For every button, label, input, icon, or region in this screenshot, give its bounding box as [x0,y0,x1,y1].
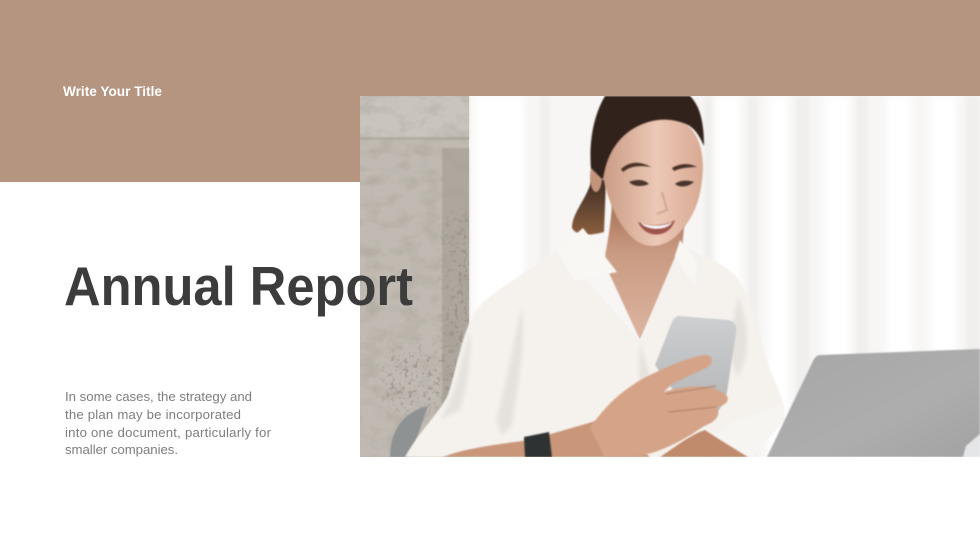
small title: Write Your Title [63,83,162,99]
header band [0,0,980,182]
description text: the plan may be incorporated [65,407,241,422]
chair [390,406,512,457]
face [601,116,703,246]
ponytail [572,178,606,235]
description text: In some cases, the strategy and [65,389,252,404]
hair [590,96,704,180]
description text: into one document, particularly for [65,425,272,440]
collar [557,228,697,286]
finger shadows [666,386,716,412]
photo: woman using a phone beside a laptop [360,96,980,457]
neck [604,205,686,340]
smartwatch [524,432,552,457]
shirt [405,245,785,457]
description text [65,389,272,457]
main heading: Annual Report [64,255,413,317]
ear [590,162,602,192]
hand [590,355,728,457]
concrete pillar [360,96,469,457]
forearms [443,418,748,457]
smartphone [655,316,736,428]
window blinds [360,96,980,457]
facial features [621,163,697,235]
description text: smaller companies. [65,442,178,457]
laptop [767,349,980,457]
